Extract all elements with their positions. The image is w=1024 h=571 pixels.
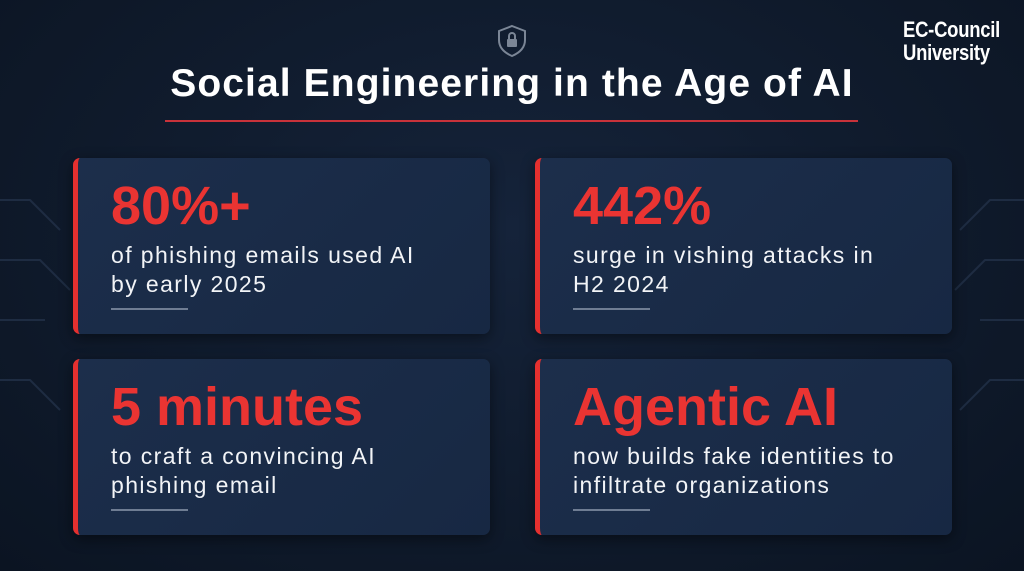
title underline [165, 120, 858, 122]
panel: 80%+: 80%+ [111, 176, 251, 236]
logo: EC-Council [903, 17, 1000, 42]
logo: University [903, 40, 990, 65]
panel: 442%: surge in vishing attacks in [573, 242, 874, 268]
panel: Agentic AI: now builds fake identities to [573, 443, 895, 469]
panel: 442%: H2 2024 [573, 271, 670, 297]
panel: 80%+ [73, 158, 490, 334]
panel: 5 minutes: phishing email [111, 472, 278, 498]
title: Social Engineering in the Age of AI [170, 62, 854, 105]
panel: 5 minutes: 5 minutes [111, 377, 363, 437]
icon: shield with lock [498, 25, 526, 57]
panel: Agentic AI: infiltrate organizations [573, 472, 830, 498]
panel: 80%+: by early 2025 [111, 271, 267, 297]
panel: Agentic AI: Agentic AI [573, 377, 838, 437]
logo [903, 17, 1000, 65]
panel: 442%: 442% [573, 176, 711, 236]
panel: Agentic AI [535, 359, 952, 535]
panel: 5 minutes [73, 359, 490, 535]
panel: 5 minutes: to craft a convincing AI [111, 443, 376, 469]
panel: 80%+: of phishing emails used AI [111, 242, 415, 268]
panel: 442% [535, 158, 952, 334]
